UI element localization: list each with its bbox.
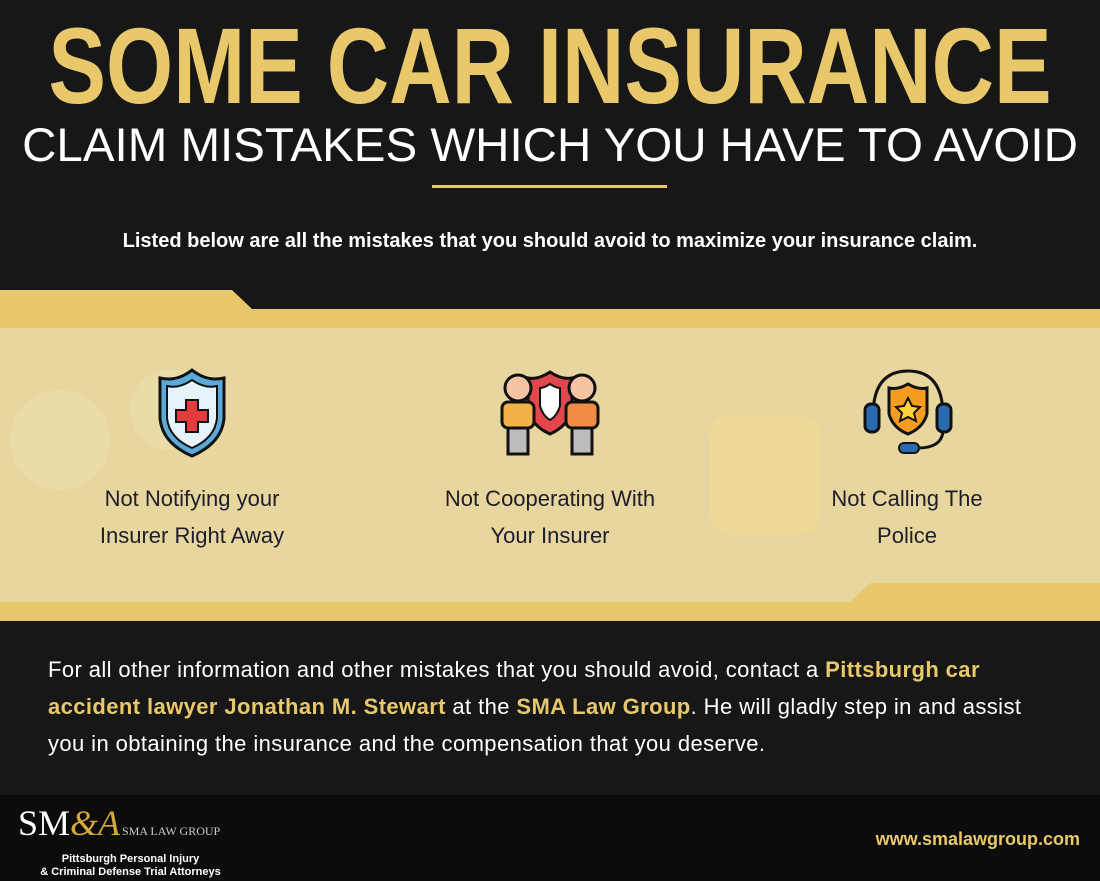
icon: shield	[158, 368, 226, 458]
panel: mistakes	[0, 290, 1100, 621]
caption 2: Your Insurer	[490, 523, 610, 548]
contact paragraph: For all other information and other mistakes that you should avoid, contact a Pittsburgh car accident lawyer Jonathan M. Stewart at the SMA Law Group. He will gladly step in and assist you in obtaining the insurance and the compensation that you deserve.	[48, 657, 1021, 756]
intro text: Listed below are all the mistakes that you should avoid to maximize your insurance claim.	[123, 230, 977, 252]
caption 3: Police	[877, 523, 937, 548]
icon: people with shield	[500, 370, 600, 456]
caption 1	[100, 486, 284, 548]
logo	[18, 803, 221, 878]
caption 3: Not Calling The	[831, 486, 983, 511]
logo: Pittsburgh Personal Injury	[62, 853, 199, 865]
icon: police headset	[864, 370, 952, 454]
caption 1: Insurer Right Away	[100, 523, 284, 548]
divider line	[432, 185, 667, 188]
caption 2: Not Cooperating With	[445, 486, 655, 511]
footer	[0, 795, 1100, 881]
caption 3	[831, 486, 983, 548]
website: www.smalawgroup.com	[876, 829, 1080, 849]
caption 2	[445, 486, 655, 548]
logo: & Criminal Defense Trial Attorneys	[40, 866, 221, 878]
logo: SM&ASMA LAW GROUP	[18, 803, 220, 843]
caption 1: Not Notifying your	[105, 486, 279, 511]
title: SOME CAR INSURANCE	[48, 5, 1052, 126]
subtitle: CLAIM MISTAKES WHICH YOU HAVE TO AVOID	[22, 119, 1078, 172]
